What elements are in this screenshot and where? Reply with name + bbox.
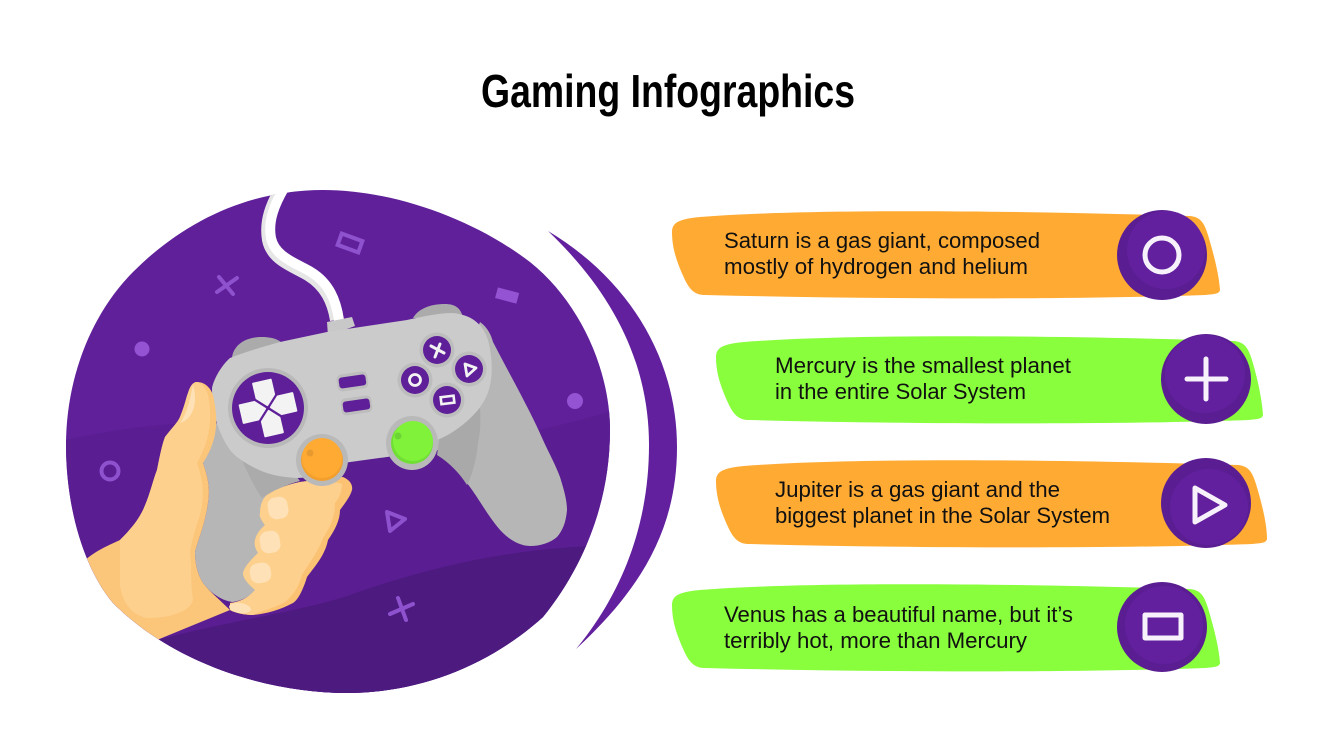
controller body [212, 313, 492, 478]
panel: Mercury [716, 334, 1263, 424]
green joystick [386, 416, 438, 470]
text: Jupiter: Jupiter is a gas giant and the [775, 477, 1060, 502]
fingers [230, 477, 352, 615]
nails [180, 385, 290, 614]
d-pad [228, 368, 308, 448]
cable top gap [274, 186, 293, 195]
cable [267, 180, 339, 320]
icon: circle [1117, 210, 1207, 300]
orange joystick [296, 434, 348, 486]
right grip [430, 322, 567, 546]
finger highlights [230, 481, 342, 615]
left grip shadow [240, 455, 300, 498]
text: Venus: terribly hot, more than Mercury [724, 628, 1027, 653]
decorative filled shapes [134, 287, 583, 409]
action buttons [398, 332, 486, 418]
icon: plus [1161, 334, 1251, 424]
icon: rectangle [1117, 582, 1207, 672]
text: Venus: Venus has a beautiful name, but it’s [724, 602, 1073, 627]
center buttons [336, 371, 373, 416]
text: Mercury: Mercury is the smallest planet [775, 353, 1071, 378]
triggers [232, 304, 463, 360]
right grip shadow [437, 408, 480, 485]
text: Mercury: in the entire Solar System [775, 379, 1026, 404]
text: Jupiter: biggest planet in the Solar System [775, 503, 1110, 528]
text: Saturn: Saturn is a gas giant, composed [724, 228, 1040, 253]
text: Saturn: mostly of hydrogen and helium [724, 254, 1028, 279]
cable connector [327, 317, 355, 336]
decorative shapes [102, 234, 413, 620]
icon: triangle [1161, 458, 1251, 548]
left grip [195, 420, 285, 602]
title: Gaming Infographics [481, 65, 855, 117]
panel: Venus [672, 582, 1220, 672]
hand [87, 382, 352, 640]
illustration: purple circle with controller [50, 180, 620, 700]
arc beside illustration [548, 231, 677, 649]
panel: Jupiter [716, 458, 1267, 548]
background blob [60, 185, 620, 700]
panel: Saturn [672, 210, 1220, 300]
